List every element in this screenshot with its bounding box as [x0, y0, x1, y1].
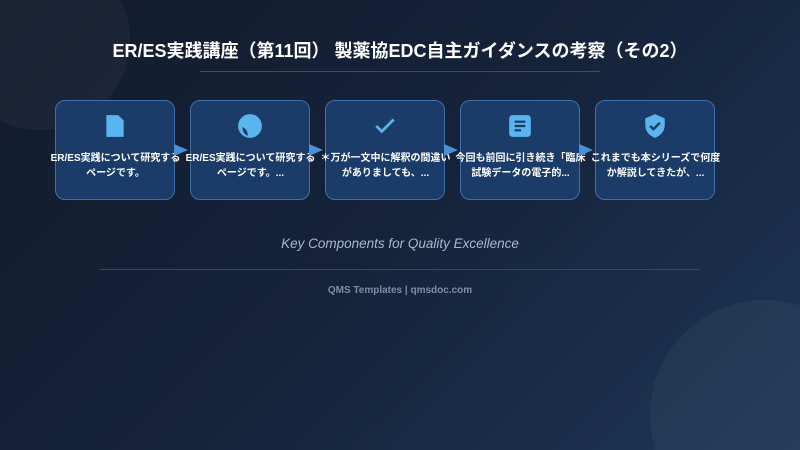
icon: file: [106, 115, 124, 137]
footer: QMS Templates | qmsdoc.com: [328, 285, 472, 296]
text 5: これまでも本シリーズで何度か解説してきたが、...: [591, 153, 720, 179]
arrow 2: [309, 144, 323, 156]
title: ER/ES実践講座（第11回） 製薬協EDC自主ガイダンスの考察（その2）: [112, 41, 687, 61]
text 2: ER/ES実践について研究するページです。...: [186, 153, 315, 179]
card 2: [190, 100, 310, 200]
text 1: ER/ES実践について研究するページです。: [51, 153, 180, 179]
subtitle: Key Components for Quality Excellence: [281, 236, 519, 251]
card 4: [460, 100, 580, 200]
arrow 4: [579, 144, 593, 156]
icon: shield: [645, 114, 665, 138]
card 5: [595, 100, 715, 200]
text 3: ＊万が一文中に解釈の間違いがありましても、...: [320, 153, 450, 179]
icon: check: [376, 118, 394, 134]
card 1: [55, 100, 175, 200]
card 3: [325, 100, 445, 200]
icon: document: [509, 115, 531, 137]
text 4: 今回も前回に引き続き「臨床試験データの電子的...: [456, 153, 586, 179]
arrow 1: [174, 144, 188, 156]
arrow 3: [444, 144, 458, 156]
icon: circle: [238, 114, 262, 138]
